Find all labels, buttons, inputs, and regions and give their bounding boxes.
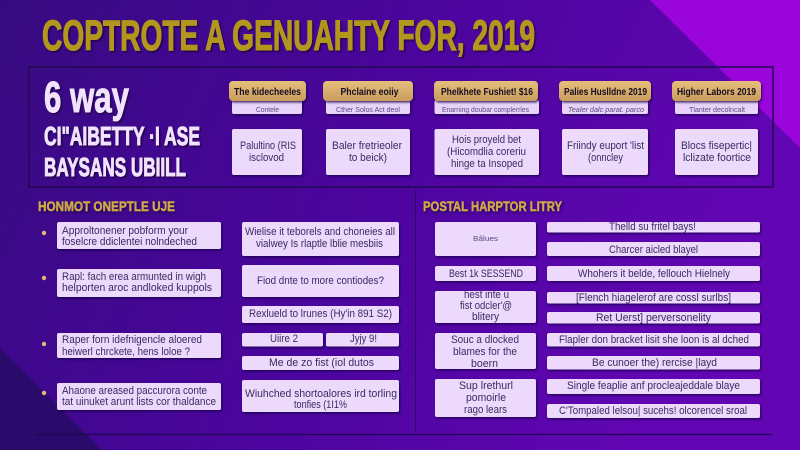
column 5: Tlanter decolncalt (689, 105, 746, 114)
answer box 5: tonfies (1I1% (294, 399, 347, 411)
bullet row 4: tat uinuket arunt lists cor thaldance (62, 396, 216, 408)
panel heading: 6 way: CI"AIBETTY ·I ASE (44, 121, 200, 151)
right detail bars: Ret Uerst] perversonelity (596, 312, 711, 324)
panel heading: 6 way (44, 73, 200, 182)
right detail bars: Thelld su fritel bays! (609, 221, 696, 233)
column 1: The kidecheeles (234, 86, 301, 98)
answer box 4: Me de zo fist (iol dutos (269, 357, 374, 369)
answer pair: Uiire 2 (270, 333, 298, 345)
column 4 (559, 81, 651, 175)
answer box 5: Wiuhched shortoalores ird torling (245, 388, 397, 400)
panel: left lower section (38, 198, 399, 412)
answer pair: Jyjy 9! (350, 333, 377, 345)
column 2: Baler fretrieoler (332, 140, 402, 152)
left label boxes: blitery (472, 311, 499, 323)
bullet row 3 (42, 333, 221, 358)
column 3 (434, 81, 539, 175)
column 4: Tealer dalc parat. parco (568, 105, 644, 114)
column 5: Blocs fisepertic| (681, 140, 752, 152)
panel heading: 6 way: BAYSANS UBIILL (44, 152, 186, 182)
column 3: (Hicomdlia coreriu (447, 146, 526, 158)
column 5 (672, 81, 761, 175)
right detail bars: Flapler don bracket lisit she loon is al dched (559, 334, 749, 346)
column 4: Palies Huslldne 2019 (564, 86, 647, 98)
left label boxes: pomoirle (466, 392, 506, 404)
left label boxes: blames for the (453, 346, 517, 358)
heading: right section: POSTAL HARPTOR LITRY (423, 198, 563, 214)
panel: top summary (29, 67, 773, 187)
panel: right lower section (423, 198, 760, 418)
answer box 4 (242, 356, 399, 370)
answer box 3 (242, 306, 399, 323)
column 4: Friindy euport 'list (567, 140, 644, 152)
bullet row 2: Rapl: fach erea armunted in wigh (62, 271, 206, 283)
column 1: Palultino (RIS (240, 140, 296, 152)
right detail bars: Single feaplie anf procleajeddale blaye (567, 380, 740, 392)
left label boxes: hest inte u (464, 289, 509, 301)
column 5: lclizate foortice (683, 152, 751, 164)
right detail bars: Charcer aicled blayel (609, 244, 698, 256)
left label boxes: Sup lrethurl (459, 380, 513, 392)
bullet row 2: helporten aroc andloked kuppols (62, 282, 212, 294)
panel heading: 6 way: 6 way (44, 73, 129, 122)
left label boxes: Best 1k SESSEND (449, 268, 523, 280)
bullet row 4 (42, 383, 221, 410)
bullet row 2 (42, 269, 221, 297)
left label boxes (435, 222, 536, 417)
column 1: isclovod (249, 152, 284, 164)
answer box 3: Rexlueld to lrunes (Hy'in 891 S2) (249, 308, 392, 320)
answer box 1: Wielise it teborels and choneies all (245, 226, 395, 238)
column 5: Higher Labors 2019 (677, 86, 756, 98)
left label boxes: fist odcler'@ (460, 300, 512, 312)
column 1: Contele (256, 105, 279, 114)
right detail bars: C'Tompaled lelsou| sucehs! olcorencel sroal (559, 405, 747, 417)
divider lines (36, 190, 772, 434)
answer box 1: vialwey Is rlaptle lblie mesbiis (256, 238, 383, 250)
left label boxes: rago lears (464, 404, 507, 416)
answer box 1 (242, 222, 399, 256)
answer pair (242, 333, 399, 346)
bullet row 1: foselcre ddiclentei nolndeched (62, 236, 197, 248)
answer box 2 (242, 265, 399, 297)
bullet row 1 (42, 222, 221, 249)
column 3: Hois proyeld bet (452, 134, 521, 146)
title: COPTROTE A GENUAHTY FOR, 2019 (42, 12, 535, 60)
bullet row 1: Approltonener pobform your (62, 225, 188, 237)
column 2: Phclaine eoiiy (340, 86, 399, 98)
right detail bars: Be cunoer the) rercise |layd (592, 357, 717, 369)
left label boxes: Souc a dlocked (451, 334, 519, 346)
column 4: (onncley (588, 152, 623, 164)
column 2: to beick) (349, 152, 387, 164)
column 1 (229, 81, 306, 175)
answer box 5 (242, 380, 399, 412)
bullet row 3: heiwerl chrckete, hens loloe ? (62, 346, 190, 358)
right detail bars: Whohers it belde, fellouch Hielnely (578, 268, 730, 280)
column 3: Phelkhete Fushiet! $16 (441, 86, 533, 98)
column 2 (323, 81, 413, 175)
bullet row 4: Ahaone areased paccurora conte (62, 385, 207, 397)
column 3: Enarning doubar complerrles (442, 105, 529, 114)
column 2: Cther Solos Act deol (336, 105, 400, 114)
answer box 2: Fiod dnte to more contiodes? (257, 275, 384, 287)
right detail bars (547, 221, 760, 418)
bullet row 3: Raper forn idefnigencle aloered (62, 334, 202, 346)
column 3: hinge ta Insoped (451, 158, 523, 170)
left label boxes: Bâlues (473, 234, 498, 243)
heading: left section: HONMOT ONEPTLE UJE (38, 198, 175, 214)
left label boxes: boern (471, 358, 498, 370)
right detail bars: [Flench hiagelerof are cossl surlbs] (576, 292, 731, 304)
